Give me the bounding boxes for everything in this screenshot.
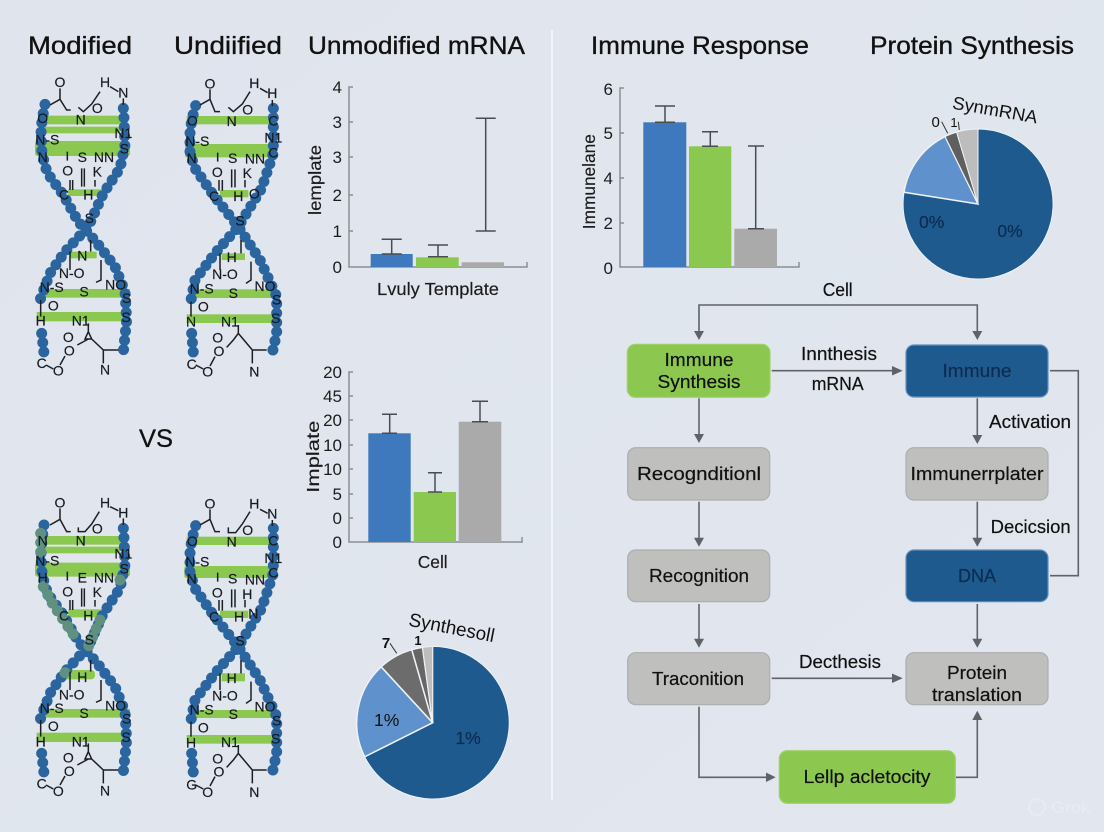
diagram: modified mRNA helix, top: S (120, 141, 129, 157)
diagram: undiified mRNA helix, top: O (249, 186, 260, 202)
diagram: undiified mRNA helix, top: NN (245, 151, 265, 167)
diagram: modified mRNA helix, top: H (36, 312, 46, 328)
heading: Undiified: Undiified (174, 32, 282, 60)
diagram: modified mRNA helix, bottom: N-S (40, 700, 64, 716)
diagram: undiified mRNA helix, top: H (267, 85, 277, 101)
diagram: modified mRNA helix, bottom: S (122, 711, 131, 727)
diagram: undiified mRNA helix, bottom (184, 496, 282, 800)
diagram: undiified mRNA helix, top: N (227, 113, 237, 129)
pie chart: Synthesoll: 7 (382, 635, 390, 652)
diagram: modified mRNA helix, bottom: O (53, 783, 64, 799)
arrow: Recognditionl to Recognition (694, 502, 704, 547)
diagram: modified mRNA helix, top: N-S (40, 279, 64, 295)
diagram: undiified mRNA helix, bottom: O (187, 533, 198, 549)
arrow: Decicsion: Decicsion (991, 517, 1071, 537)
diagram: modified mRNA helix, bottom: H (38, 570, 48, 586)
diagram: modified mRNA helix, bottom: O (62, 583, 73, 599)
bar chart: Lvuly Template (305, 78, 527, 299)
box: Immunerrplater (906, 448, 1048, 500)
bar chart: Lvuly Template: 3 (333, 148, 342, 167)
diagram: undiified mRNA helix, top: S (235, 213, 245, 229)
diagram: modified mRNA helix, top: H (100, 74, 110, 90)
diagram: undiified mRNA helix, top (185, 75, 282, 379)
diagram: undiified mRNA helix, bottom: N (248, 606, 258, 622)
arrow: Innthesis mRNA: mRNA (812, 374, 864, 394)
diagram: modified mRNA helix, bottom: NO (105, 697, 126, 713)
bar chart: Lvuly Template: Lvuly Template (377, 279, 499, 299)
diagram: undiified mRNA helix, top: N-O (212, 266, 238, 282)
arrow: Decthesis (772, 652, 903, 683)
diagram: modified mRNA helix, top: N-O (59, 265, 85, 281)
diagram: modified mRNA helix, top: NO (105, 277, 126, 293)
diagram: modified mRNA helix, top: O (55, 74, 66, 90)
bar chart: Lvuly Template: lemplate (305, 145, 325, 215)
box: Protein translation (906, 653, 1048, 705)
diagram: undiified mRNA helix, top: S (228, 150, 237, 166)
diagram: modified mRNA helix, bottom: S (121, 729, 131, 745)
diagram: undiified mRNA helix, bottom: N1 (221, 734, 239, 750)
box: Lellp acletocity: Lellp acletocity (804, 767, 930, 787)
diagram: undiified mRNA helix, top: O (198, 299, 209, 315)
pie chart: SynmRNA: SynmRNA (951, 93, 1039, 127)
diagram: modified mRNA helix, top: O (92, 100, 103, 116)
diagram: undiified mRNA helix, top: N1 (264, 129, 282, 145)
diagram: undiified mRNA helix, bottom: N (267, 506, 277, 522)
box: DNA (906, 550, 1048, 602)
diagram: modified mRNA helix, top: N (38, 149, 48, 165)
pie chart: Synthesoll: 1% (455, 728, 481, 748)
diagram: undiified mRNA helix, top: N (187, 150, 197, 166)
diagram: undiified mRNA helix, bottom: S (271, 731, 280, 747)
diagram: undiified mRNA helix, bottom: N-O (212, 687, 238, 703)
box: Immune Synthesis: Immune (664, 350, 734, 370)
box: Traconition: Traconition (652, 669, 744, 689)
diagram: modified mRNA helix, bottom: N-S (35, 552, 59, 568)
diagram: undiified mRNA helix, bottom: C (268, 532, 278, 548)
bar chart: Cell: Implate (303, 421, 323, 493)
pie chart: Synthesoll (357, 610, 509, 799)
diagram: modified mRNA helix, top: O (37, 110, 48, 126)
box: Recognition: Recognition (649, 566, 749, 586)
diagram: modified mRNA helix, bottom: H (36, 733, 46, 749)
heading: Protein Synthesis: Protein Synthesis (870, 32, 1074, 60)
box: Immune Synthesis (627, 344, 770, 397)
diagram: modified mRNA helix, top: S (78, 149, 87, 165)
diagram: modified mRNA helix, top: O (48, 297, 59, 313)
diagram: undiified mRNA helix, top: O (187, 112, 198, 128)
diagram: undiified mRNA helix, top: S (229, 285, 238, 301)
diagram: modified mRNA helix, bottom: C (37, 776, 47, 792)
diagram: modified mRNA helix, bottom: C (59, 607, 69, 623)
pie chart: SynmRNA: 0% (919, 212, 944, 232)
pie chart: SynmRNA: 0% (997, 221, 1023, 241)
diagram: undiified mRNA helix, top: O (205, 75, 216, 91)
diagram: undiified mRNA helix, top: C (268, 145, 278, 161)
diagram: undiified mRNA helix, top: O (202, 363, 213, 379)
diagram: undiified mRNA helix, top: C (268, 112, 278, 128)
diagram: undiified mRNA helix, bottom: H (186, 735, 196, 751)
arrow: Lellp acletocity to Protein translation (956, 711, 982, 777)
diagram: undiified mRNA helix, bottom: C (268, 565, 278, 581)
arrow: Traconition to Lellp acletocity (699, 707, 776, 782)
box: Lellp acletocity (779, 751, 955, 803)
bar chart: Immune Response: 5 (604, 124, 613, 143)
diagram: undiified mRNA helix, bottom: O (202, 784, 213, 800)
pie chart: Synthesoll: 1 (414, 633, 422, 648)
diagram: undiified mRNA helix, bottom: S (229, 706, 238, 722)
diagram: modified mRNA helix, bottom: N (76, 532, 86, 548)
diagram: modified mRNA helix, bottom (35, 494, 132, 799)
connector: Immune to DNA feedback (1050, 371, 1078, 576)
arrow: Activation: Activation (989, 412, 1071, 432)
diagram: undiified mRNA helix, top: C (187, 356, 197, 372)
diagram: modified mRNA helix, bottom: O (55, 494, 66, 510)
box: Protein translation: Protein (947, 663, 1007, 683)
bar chart: Cell: 45 (323, 387, 342, 406)
diagram: modified mRNA helix, bottom: H (83, 607, 93, 623)
bar chart: Immune Response: 4 (604, 169, 613, 188)
box: Immune: Immune (942, 361, 1012, 381)
diagram: undiified mRNA helix, top: H (233, 188, 243, 204)
diagram: modified mRNA helix, top: O (53, 362, 64, 378)
diagram: modified mRNA helix, top: O (64, 342, 75, 358)
bar chart: Cell: 0 (333, 509, 342, 528)
bar chart: Immune Response: 0 (604, 259, 613, 278)
label: VS: VS (139, 425, 173, 453)
diagram: undiified mRNA helix, top: N-S (190, 281, 214, 297)
pie chart: SynmRNA: 1 (950, 115, 958, 130)
bar chart: Cell: 10 (323, 436, 342, 455)
diagram: modified mRNA helix, bottom: N (100, 782, 110, 798)
diagram: modified mRNA helix, bottom: S (85, 631, 94, 647)
diagram: undiified mRNA helix, bottom: NO (255, 699, 276, 715)
diagram: undiified mRNA helix, bottom: O (212, 585, 223, 601)
arrow: Immune Synthesis to Recognditionl (694, 398, 704, 443)
diagram: modified mRNA helix, top: NN (94, 149, 114, 165)
arrow: DNA to Protein translation (972, 604, 982, 648)
bar chart: Lvuly Template: 4 (333, 78, 342, 97)
bar chart: Immune Response: Immunelane (579, 134, 599, 229)
diagram: undiified mRNA helix, bottom: H (249, 496, 259, 512)
box: Recognditionl (628, 448, 770, 500)
diagram: undiified mRNA helix, top: S (271, 310, 280, 326)
diagram: undiified mRNA helix, bottom: O (212, 750, 223, 766)
diagram: undiified mRNA helix, bottom: O (242, 522, 253, 538)
diagram: modified mRNA helix, bottom: E (78, 570, 87, 586)
pie chart: SynmRNA (903, 93, 1053, 279)
diagram: modified mRNA helix, bottom: H (100, 494, 110, 510)
diagram: modified mRNA helix, top: H (83, 187, 93, 203)
box: Recognditionl: Recognditionl (637, 464, 761, 484)
diagram: undiified mRNA helix, top: N (186, 313, 196, 329)
diagram: undiified mRNA helix, bottom: C (209, 609, 219, 625)
diagram: undiified mRNA helix, top: C (209, 188, 219, 204)
diagram: modified mRNA helix, top: N (77, 248, 87, 264)
bar chart: Immune Response: 6 (604, 80, 613, 99)
bar chart: Immune Response: 2 (604, 214, 613, 233)
diagram: modified mRNA helix, bottom: O (64, 763, 75, 779)
diagram: modified mRNA helix, bottom: O (63, 750, 74, 766)
diagram: undiified mRNA helix, bottom: N-S (190, 701, 214, 717)
diagram: modified mRNA helix, top: S (122, 290, 131, 306)
diagram: modified mRNA helix, bottom: H (118, 505, 128, 521)
diagram: undiified mRNA helix, bottom: N (187, 571, 197, 587)
arrow: Cell splits to both branches: Cell (823, 280, 853, 300)
diagram: modified mRNA helix, bottom: N (38, 532, 48, 548)
diagram: modified mRNA helix, top: N-S (35, 132, 59, 148)
diagram: undiified mRNA helix, top: O (212, 330, 223, 346)
diagram: modified mRNA helix, bottom: K (93, 584, 103, 600)
diagram: modified mRNA helix, top: O (63, 329, 74, 345)
diagram: undiified mRNA helix, top: O (242, 101, 253, 117)
bar chart: Cell: 20 (323, 411, 342, 430)
arrow: Activation (972, 398, 1071, 444)
flowchart: immune response to protein synthesis (627, 280, 1078, 803)
diagram: undiified mRNA helix, bottom: N (249, 784, 259, 800)
pie chart: Synthesoll: 1% (374, 710, 399, 730)
diagram: modified mRNA helix, top: C (37, 355, 47, 371)
arrow: Innthesis mRNA: Innthesis (801, 344, 877, 364)
diagram: undiified mRNA helix, top: S (272, 292, 281, 308)
box: Traconition (628, 653, 770, 705)
diagram: modified mRNA helix, top: S (121, 309, 131, 325)
bar chart: Lvuly Template: 1 (333, 222, 342, 241)
diagram: undiified mRNA helix, top: K (243, 165, 253, 181)
box: Immunerrplater: Immunerrplater (910, 464, 1044, 484)
bar chart: Cell: 20 (323, 363, 342, 382)
diagram: undiified mRNA helix, top: H (227, 249, 237, 265)
heading: Unmodified mRNA: Unmodified mRNA (308, 32, 525, 60)
diagram: undiified mRNA helix, bottom: N1 (264, 550, 282, 566)
bar chart: Cell: 10 (323, 460, 342, 479)
heading: Modified: Modified (28, 32, 132, 60)
diagram: undiified mRNA helix, bottom: O (198, 719, 209, 735)
diagram: undiified mRNA helix, top: N-S (185, 133, 209, 149)
diagram: undiified mRNA helix, bottom: S (235, 633, 245, 649)
diagram: undiified mRNA helix, bottom: N (227, 534, 237, 550)
box: Immune (906, 345, 1048, 397)
diagram: modified mRNA helix, top: K (93, 163, 103, 179)
diagram: modified mRNA helix, bottom: NN (94, 570, 114, 586)
diagram: undiified mRNA helix, bottom: G (186, 777, 197, 793)
box: Protein translation: translation (932, 685, 1022, 705)
pie chart: SynmRNA: 0 (932, 114, 940, 131)
bar chart: Lvuly Template: 0 (333, 258, 342, 277)
diagram: modified mRNA helix, top: N (100, 362, 110, 378)
diagram: undiified mRNA helix, top: O (212, 164, 223, 180)
heading: Immune Response: Immune Response (591, 32, 809, 60)
box: Recognition (628, 550, 770, 602)
diagram: undiified mRNA helix, bottom: NN (245, 571, 265, 587)
diagram: undiified mRNA helix, bottom: O (205, 496, 216, 512)
diagram: undiified mRNA helix, bottom: H (227, 670, 237, 686)
diagram: undiified mRNA helix, top: NO (255, 278, 276, 294)
diagram: modified mRNA helix, top: N1 (114, 125, 132, 141)
diagram: modified mRNA helix, bottom: O (92, 521, 103, 537)
arrow: Decicsion (972, 502, 1071, 547)
box: DNA: DNA (958, 566, 996, 586)
diagram: undiified mRNA helix, top: N (249, 363, 259, 379)
diagram: modified mRNA helix, top: N (118, 84, 128, 100)
bar chart: Cell (303, 363, 522, 572)
diagram: undiified mRNA helix, bottom: H (242, 586, 252, 602)
arrow: Innthesis mRNA (772, 344, 903, 394)
box: Immune Synthesis: Synthesis (658, 372, 740, 392)
diagram: undiified mRNA helix, bottom: N-S (185, 554, 209, 570)
diagram: modified mRNA helix, top: N (76, 112, 86, 128)
diagram: modified mRNA helix, bottom: N1 (114, 546, 132, 562)
diagram: modified mRNA helix, bottom: O (48, 718, 59, 734)
bar chart: Cell: 0 (333, 533, 342, 552)
diagram: undiified mRNA helix, bottom: H (234, 609, 244, 625)
diagram: modified mRNA helix, top: S (85, 210, 94, 226)
bar chart: Lvuly Template: 2 (333, 186, 342, 205)
arrow: Decthesis: Decthesis (799, 652, 881, 672)
bar chart: Immune Response (579, 80, 799, 278)
diagram: undiified mRNA helix, top: H (249, 75, 259, 91)
watermark: Grok: Grok (1051, 798, 1091, 817)
diagram: modified mRNA helix, top: N1 (72, 312, 90, 328)
diagram: undiified mRNA helix, bottom: O (214, 764, 225, 780)
diagram: modified mRNA helix, bottom: S (79, 705, 89, 721)
diagram: modified mRNA helix, top (35, 74, 132, 378)
pie chart: Synthesoll: Synthesoll (407, 610, 496, 647)
watermark: Grok (1029, 798, 1091, 817)
diagram: modified mRNA helix, top: O (62, 163, 73, 179)
diagram: modified mRNA helix, top: S (79, 283, 89, 299)
diagram: undiified mRNA helix, top: O (214, 343, 225, 359)
diagram: modified mRNA helix, bottom: H (77, 669, 87, 685)
diagram: modified mRNA helix, bottom: N1 (72, 733, 90, 749)
diagram: undiified mRNA helix, bottom: S (228, 571, 237, 587)
diagram: modified mRNA helix, bottom: S (120, 561, 129, 577)
arrow: Cell splits to both branches (694, 280, 982, 340)
bar chart: Cell: 5 (333, 485, 342, 504)
bar chart: Cell: Cell (418, 552, 448, 572)
diagram: undiified mRNA helix, bottom: S (272, 712, 281, 728)
diagram: undiified mRNA helix, top: N1 (221, 313, 239, 329)
bar chart: Lvuly Template: 3 (333, 113, 342, 132)
diagram: modified mRNA helix, top: C (59, 187, 69, 203)
arrow: Recognition to Traconition (694, 604, 704, 648)
diagram: modified mRNA helix, bottom: N-O (59, 687, 85, 703)
